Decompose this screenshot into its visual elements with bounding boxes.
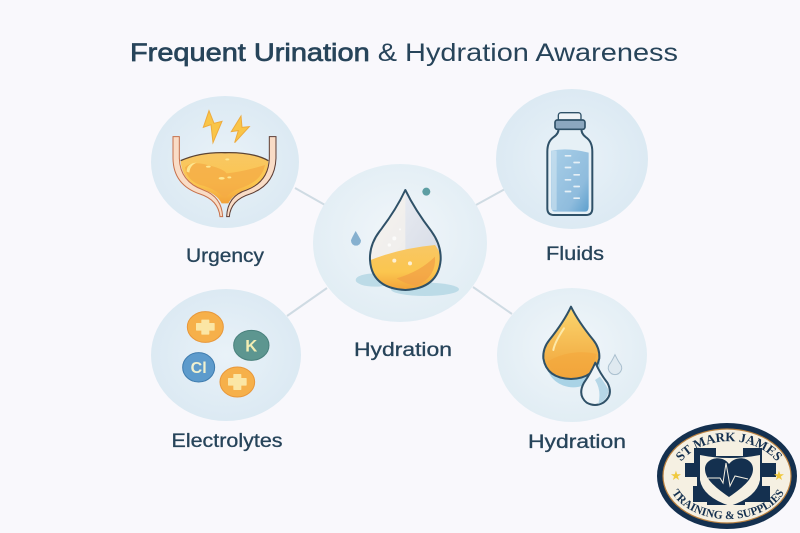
logo pulse: [708, 463, 748, 486]
logo text bottom: TRAINING & SUPPLIES: [672, 488, 784, 520]
electrolytes disc: [151, 289, 301, 421]
label: Electrolytes: Electrolytes: [172, 431, 282, 452]
ion: chloride: Cl: [191, 360, 207, 377]
icon: electrolyte ions: [183, 312, 269, 397]
ion: plus top: [187, 312, 223, 342]
connector lines: [287, 188, 512, 316]
panel: fluids: [496, 89, 648, 265]
logo text top: ST MARK JAMES: [676, 432, 782, 461]
logo star right: ★: [773, 468, 785, 483]
icon: water bottle: [547, 113, 592, 215]
logo outer ring: [657, 423, 797, 529]
title: Frequent Urination & Hydration Awareness: [130, 39, 678, 67]
label: Hydration centre: Hydration: [354, 340, 452, 361]
logo heart: [705, 458, 753, 497]
ion: potassium: K: [245, 336, 257, 355]
logo star left: ★: [670, 468, 682, 483]
fluids disc: [496, 89, 648, 229]
logo shield: [700, 455, 760, 506]
icon: centre drop: [351, 188, 459, 296]
logo navy cross bands: [685, 448, 776, 505]
label: Urgency: Urgency: [186, 246, 265, 267]
icon: bladder with lightning: [173, 111, 276, 217]
panel: electrolytes: [151, 289, 301, 452]
panel: urgency: [151, 96, 299, 267]
icon: amber and water drops: [543, 307, 622, 405]
logo cross top: [716, 447, 743, 456]
ion: plus bottom: [220, 367, 255, 397]
panel: hydration lower right: [497, 288, 647, 453]
urgency disc: [151, 96, 299, 228]
label: Hydration lower right: Hydration: [528, 432, 626, 453]
logo inner field: [663, 429, 791, 523]
centre disc: [313, 164, 487, 322]
panel: hydration centre: [313, 164, 487, 361]
label: Fluids: Fluids: [546, 244, 604, 265]
hydration disc: [497, 288, 647, 422]
logo: St Mark James Training & Supplies: [657, 423, 797, 529]
